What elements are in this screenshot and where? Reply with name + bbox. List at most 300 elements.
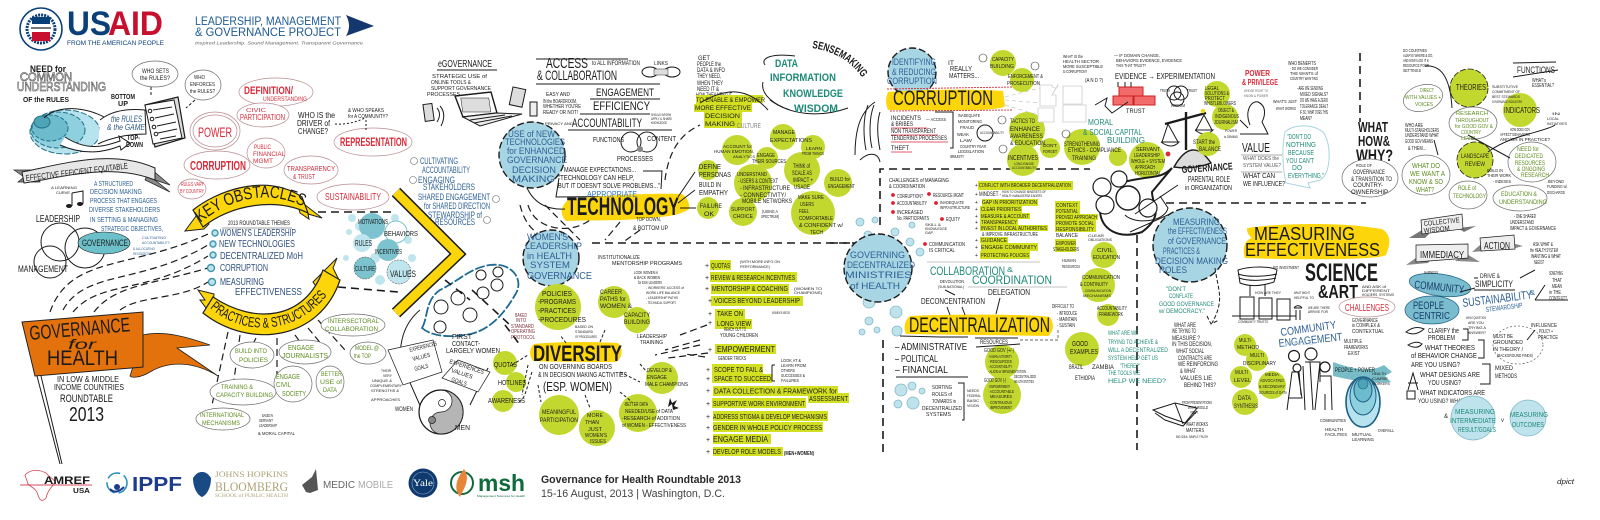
text block: numbered governance functions: STAKEHOLDERS: [423, 182, 475, 192]
text block: types of corruption: & BRIBES: [891, 121, 913, 128]
circles: measuring intermediate results and outcomes: RESULT/GOALS: [1458, 425, 1496, 434]
lime circles: technology tips: ENGAGEMENT: [828, 184, 855, 190]
heading: appropriate technology: & BOTTOM UP: [633, 226, 668, 232]
circle: governing decentralized ministries of health: [844, 234, 915, 302]
text block: servant leadership note: STRENGTHS &: [371, 388, 399, 393]
heading: sustainability and stewardship: SUSTAINABILITY: [1462, 288, 1533, 310]
flag: HEALTH: [47, 347, 118, 370]
list: decentralization highlighted items: CONTEXT: [1056, 203, 1078, 209]
lime circles: good examples and communication: ZAMBIA: [1092, 365, 1114, 371]
callout: must be grounded in theory: METHODS: [1495, 373, 1517, 380]
text block: types of corruption: NON TRANSPARENT: [891, 129, 936, 135]
callout: must be grounded in theory: POLICY +: [1539, 329, 1553, 335]
text block: functions and notes: WHO ARE: [1405, 123, 1423, 129]
text block: what are we trying to measure: VALUES LIE: [1180, 376, 1212, 382]
diagram: nested health system rings: FACILITIES: [1325, 432, 1347, 437]
lime circles: good examples and communication: EXAMPLES: [1070, 349, 1098, 356]
text block: ask what the system wanting: WANTING & WHAT: [1531, 254, 1561, 260]
text block: governance definition: STRATEGIC OBJECTIVES,: [101, 226, 163, 233]
list: diversity action items: +: [706, 449, 710, 456]
list: decentralization highlighted items: +: [975, 245, 978, 251]
lime circles: technology tips: EXPECTATIONS: [770, 138, 812, 144]
text block: administrative political financial: – FINANCIAL: [895, 365, 948, 376]
text block: sorting roles with molecule: VISION: [967, 403, 979, 408]
bubble: rules vary by country: [178, 179, 206, 199]
diagram: nested health system rings: MUTUAL: [1352, 432, 1373, 437]
list: diversity action items: (MEN+WOMEN): [784, 451, 814, 457]
heading: need for common understanding: OF the RULES: [23, 95, 69, 104]
bubble: research throughput: for GOOD GOV &: [1455, 124, 1493, 130]
text block: sorting roles with molecule: BASIC: [967, 398, 979, 403]
USAID logo: FROM THE AMERICAN PEOPLE: [67, 40, 165, 47]
icon: puzzle pieces: [1005, 85, 1086, 122]
heading: measuring effectiveness: EFFECTIVENESS: [1245, 240, 1380, 260]
circle: measuring effectiveness of governance practices: [1153, 208, 1228, 282]
text block: who is the driver of change: WHO IS the: [298, 111, 335, 120]
circle: identifying and reducing corruption: IDENTIFYING: [892, 57, 936, 67]
heading: e-governance: [427, 59, 497, 98]
logo: MSH: Management Sciences for Health: [477, 494, 525, 498]
list: diversity action items: +: [706, 376, 710, 383]
illustration: open book: - WHAT WORKS: [1184, 422, 1208, 428]
text block: what are we trying to measure: & WHAT: [1180, 369, 1196, 375]
text block: institutionalize mentorship: - TECHNICAL SUPPORT: [646, 300, 676, 305]
ribbon: immediacy: [1406, 244, 1480, 265]
text block: sorting roles with molecule: TOWARDS in: [932, 399, 956, 405]
bubble: role of governance transition: GOVERNANCE: [1353, 170, 1385, 176]
text block: resources and good governance: HEALTH ENTITIES: [1014, 379, 1034, 384]
list: diversity action items: YOUNG CHILDREN: [720, 333, 758, 339]
text block: get people the data: GET: [698, 55, 710, 62]
text block: servant leadership note: BASED IN: [262, 413, 273, 418]
text block: numbered governance functions: STEWARDSHIP of: [428, 210, 482, 220]
text block: challenges of managing: CORRUPTION?: [897, 194, 923, 200]
list: diversity action items: +: [706, 367, 710, 374]
text block: functions and notes: & THEM...: [1408, 146, 1426, 152]
text block: engagement efficiency accountability: APPLY & SHARE: [651, 116, 672, 121]
lime circles: diversity actions: DEVELOP &: [647, 368, 672, 374]
circle: governing decentralized ministries of health: GOVERNING: [850, 250, 905, 260]
callout: must be grounded in theory: [1493, 323, 1558, 380]
lime circles: diversity actions: THAN: [585, 420, 599, 426]
text block: get people the data: PEOPLE the: [697, 62, 721, 68]
bubble: public financial mgmt: FINANCIAL: [253, 151, 285, 158]
ribbon: effective efficient equitable: [14, 159, 170, 192]
bubble: intersectoral collaboration: INTERSECTORAL: [328, 318, 379, 325]
list: decentralization highlighted items: MINDSET -: [979, 192, 1001, 198]
text block: institutionalize mentorship: STANDARD: [575, 330, 593, 334]
lime circles: legal and balance: BALANCE: [1199, 147, 1221, 153]
lime circles: measurement methods: SYNTHESIS: [1234, 404, 1258, 410]
icon: building with documents: WE ARE THERE: [1308, 306, 1331, 310]
text block: governance definition: A STRUCTURED: [94, 181, 133, 188]
icon: building with documents: WHAT MIGHT: [1294, 291, 1311, 295]
subtitle: in low and middle income countries roundtable 2013: 2013: [69, 404, 104, 426]
arrow: dashed curve: [1207, 268, 1220, 324]
text block: challenges of managing: INCREASED: [897, 210, 923, 216]
text block: functions and notes: SUBSTITUTIVE: [1492, 84, 1518, 89]
bubble: power: [190, 112, 240, 150]
heading: decentralization: DECONCENTRATION: [921, 297, 985, 306]
callout: manage expectations: "TECHNOLOGY CAN HELP,: [558, 175, 634, 182]
bubble: engage journalists: [279, 340, 331, 364]
bubble: model at the top: MODEL @: [355, 345, 379, 352]
lime circles: legal and balance: INDIGENOUS: [1215, 114, 1240, 120]
bubble: need dedicated resources: RESOURCES: [1515, 161, 1545, 167]
lime circles: technology tips: PERSONAS: [699, 172, 731, 179]
text block: easy and in the boardroom: READY OR NOT!: [543, 110, 578, 116]
ribbon: collective wisdom: COLLECTIVE: [1423, 217, 1460, 228]
illustration: yin yang with values lists: VALUES: [412, 353, 431, 363]
text block: what are we trying to measure: CONTRACTS ARE: [1178, 356, 1212, 362]
logo: Medic Mobile: [302, 469, 393, 493]
list: decentralization highlighted items: ENGAGE COMMUNITY: [981, 245, 1037, 251]
lime circles: technology tips: LEARN: [806, 146, 822, 151]
heading: what how why: WHY?: [1356, 146, 1393, 165]
text block: types of corruption: INADEQUATE: [958, 113, 980, 118]
list: decentralization highlighted items: +: [975, 200, 978, 206]
callout: manage expectations: [556, 167, 662, 197]
text block: governance complex contextual: GOVERNANCE: [1352, 318, 1378, 324]
text block: resources and good governance: GOOD GOV (+/-): [984, 348, 1014, 354]
circle: use of new technologies: GOVERNANCE: [507, 155, 567, 165]
list: diversity action items: VOICES BEYOND LEADERSHIP: [714, 298, 800, 305]
text block: numbered governance functions: RESOURCES: [435, 217, 475, 227]
list: decentralization highlighted items: [975, 181, 1112, 259]
bubble: don't do nothing: BECAUSE: [1288, 150, 1314, 157]
text block: functions and notes: IMPACT & GOVERNANCE: [1510, 226, 1557, 232]
lime circles: technology tips: MANAGE: [773, 130, 795, 136]
lime circles: anti-corruption tactics: SERVANT: [1136, 147, 1160, 153]
heading: access and collaboration: & COLLABORATION: [537, 67, 617, 83]
list: decentralization highlighted items: +: [975, 253, 978, 259]
illustration: open book: [1153, 400, 1212, 439]
list: decentralization highlighted items: POTENTIAL: [1056, 209, 1078, 215]
illustration: open book: WHAT WOULD: [1188, 405, 1208, 410]
circle: women's leadership: [523, 230, 592, 286]
text block: first contact largely women: [446, 334, 500, 355]
list: decentralization highlighted items: PROVED APPROACH: [1056, 215, 1097, 221]
lime circles: measurement methods: SOURCES of DATA: [1259, 390, 1287, 395]
lime circles: good examples and communication: ACCOUNTABILITY: [1097, 306, 1127, 312]
text block: governance definition: RESOURCES: [133, 251, 151, 256]
bubble: connect values: WITH VALUES +: [1405, 95, 1441, 101]
text block: types of corruption: THEFT: [891, 145, 909, 152]
text block: drive and simplicity: SIMPLICITY: [1475, 279, 1513, 289]
list: design questions: YOU USING?: [1428, 380, 1461, 387]
bubble: role of technology: [1449, 181, 1487, 209]
list: diversity action items: (WITH MORE INFO ON: [740, 259, 780, 264]
bubble: what do we want to know: WHAT?: [1416, 187, 1434, 194]
text block: servant leadership note: LEADERSHIP: [259, 423, 277, 428]
bubble: rules vary by country: RULES VARY: [181, 182, 204, 188]
lime circles: theories indicators landscape review: THEORIES: [1456, 83, 1486, 92]
quote: don't conflate good governance: "DON'T: [1166, 286, 1186, 293]
Leadership, Management and Governance Project logo: LEADERSHIP, MANAGEMENT: [195, 14, 342, 28]
bubble: role of technology: TECHNOLOGY: [1453, 194, 1486, 200]
bubble: don't do nothing: EVERYTHING.": [1288, 173, 1324, 180]
text block: power and privilege: WHAT'S JUST: [1273, 99, 1297, 104]
bubble: role of technology: ROLE of: [1458, 186, 1476, 192]
text block: sorting roles with molecule: SORTING: [932, 385, 952, 391]
illustration: yin yang with values lists: [388, 310, 490, 434]
text block: roundtable themes list: [208, 220, 303, 298]
lime circles: technology tips: ANALYTICS: [733, 154, 755, 159]
panel: red concept bubbles: [178, 78, 412, 210]
list: decentralization highlighted items: RESPONSIBILITY: [1056, 227, 1095, 233]
list: diversity action items: REVIEW & RESEARCH INCENTIVES: [711, 275, 795, 282]
circles: measuring intermediate results and outcomes: &: [1444, 414, 1448, 420]
text block: functions and notes: HOW DOES GOV: [1510, 127, 1530, 132]
text block: what is the health sector: HEALTH SECTOR: [1063, 59, 1100, 64]
bubble: definition understanding: DEFINITION/: [244, 85, 293, 97]
text block: power and privilege: [1240, 69, 1297, 134]
ribbon: collective wisdom: [1409, 214, 1476, 238]
text block: easy and in the boardroom: PRIVACY AND: [545, 121, 573, 126]
text block: governance complex contextual: EXIST: [1348, 351, 1360, 357]
list: diversity action items: +: [708, 320, 712, 327]
bubble: better use of data: DATA: [323, 387, 338, 394]
bubble: who enforces the rules: [185, 70, 221, 108]
text block: what are we trying to achieve: WILL A DECENTRALIZED: [1108, 347, 1168, 354]
list: diversity action items: FAILURES: [781, 378, 799, 383]
lime circles: measurement methods: DISCIPLINARY: [1243, 361, 1276, 367]
lime circles: measurement methods: ADVOCATING: [1260, 378, 1284, 383]
text block: types of corruption: TENDERING PROCESSES: [891, 136, 947, 142]
diagram: nested health system rings: COMMUNITIES: [1320, 418, 1346, 423]
text block: servant leadership note: [258, 368, 402, 436]
list: design questions: WHAT THEORIES: [1425, 343, 1475, 352]
text block: roundtable themes list: MEASURING: [220, 277, 264, 288]
circles: measuring intermediate results and outcomes: [1444, 396, 1548, 440]
bubble: sustainability: SUSTAINABILITY: [325, 192, 381, 203]
illustration: yin yang with values lists: MEN: [455, 425, 470, 432]
text block: institutionalize mentorship: BASED ON: [575, 325, 593, 329]
illustration: open book: MATTERS: [1186, 428, 1204, 434]
Leadership, Management and Governance Project logo: [195, 14, 374, 46]
text block: get people the data: DATA & INFO: [697, 68, 725, 74]
diagram: leadership management governance venn: LEADERSHIP: [36, 214, 80, 225]
bubble: better use of data: BETTER: [321, 371, 342, 378]
bubble: corruption: CORRUPTION: [190, 158, 246, 173]
list: decentralization highlighted items: & IMPROVE INFRASTRUCTURE: [982, 232, 1038, 238]
heading: what how why: WHAT: [1358, 119, 1388, 136]
text block: what are we trying to achieve: HELP WE NEED?: [1108, 378, 1166, 385]
ribbon: collective wisdom: WISDOM: [1423, 225, 1450, 235]
logo: Yale: [408, 468, 438, 498]
ellipse: people centric: PEOPLE: [1413, 300, 1444, 312]
bubble: who enforces the rules: the RULES?: [190, 89, 215, 95]
text block: servant leadership note: UNIQUE &: [372, 378, 392, 383]
panel: motivations cluster: [343, 213, 418, 285]
venn: functions content processes: [593, 132, 676, 163]
text block: types of corruption: INCIDENTS: [891, 115, 922, 122]
text block: functions and notes: FUNCTIONS: [1517, 65, 1555, 75]
text block: community engagement: IS CRITICAL: [1285, 341, 1314, 346]
circle: women's leadership: WOMEN'S: [527, 232, 568, 242]
illustration: open book: FROM PRESENTATIONS: [1182, 400, 1212, 405]
list: design questions: CLARIFY the: [1428, 328, 1459, 335]
text block: what are we trying to achieve: SYSTEM HELP GET US: [1108, 355, 1158, 362]
curved text: sensemaking: SENSEMAKING: [812, 40, 868, 76]
lime circles: technology tips: FROM THINGS: [802, 151, 824, 156]
lime circles: technology tips: ENGAGE: [757, 153, 776, 159]
icon: learning curve music notes: CURVE: [56, 190, 70, 195]
text block: what is the health sector: BEHAVIORS EVIDENCE, EVIDENCE: [1116, 58, 1182, 64]
text block: types of corruption: MONITORING: [958, 119, 982, 124]
text block: roundtable themes list: DECENTRALIZED MoH: [220, 251, 303, 262]
logo: Johns Hopkins Bloomberg: [193, 470, 288, 499]
bubble: who sets the rules: WHO SETS: [142, 68, 170, 75]
illustration: hand: [855, 102, 880, 162]
text block: power and privilege: & PRIVILEGE: [1242, 78, 1278, 87]
logo: AMREF USA: AMREF: [44, 475, 90, 487]
text block: functions and notes: DO COUNTRIES: [1403, 48, 1427, 53]
text block: easy and in the boardroom: [543, 92, 582, 126]
lime circles: anti-corruption tactics: BUILDING: [990, 64, 1014, 70]
illustration: yin yang with values lists: GOALS: [450, 377, 467, 388]
list: diversity action items: ASSESSMENT: [809, 396, 849, 403]
text block: numbered governance functions: ACCOUNTABILITY: [422, 165, 470, 175]
bubble: culture: CULTURE: [355, 266, 375, 273]
circle: women's leadership: in HEALTH: [527, 251, 572, 261]
circles: measuring intermediate results and outcomes: OUTCOMES: [1512, 420, 1544, 429]
bubble: who sets the rules: the RULES?: [140, 75, 170, 82]
bubble: what do we want to know: KNOW & SO: [1409, 179, 1443, 186]
bubble: definition understanding: [239, 78, 313, 106]
text block: ask what the system wanting: SOMETHING: [1549, 271, 1563, 277]
list: diversity action items: (WOMEN TO: [794, 286, 822, 291]
bubble: transparency and trust: & TRUST: [293, 174, 316, 181]
circle: governing decentralized ministries of health: DECENTRALIZED: [847, 260, 915, 270]
lime circles: technology tips: USERS: [800, 202, 814, 208]
lime circles: diversity actions: POLICIES: [542, 291, 572, 298]
text block: functions and notes: DISCHARGE: [1547, 190, 1565, 195]
text block: sorting roles with molecule: SYSTEMS: [926, 412, 951, 418]
lime circles: good examples and communication: HUMAN: [1062, 258, 1076, 263]
text block: ask what the system wanting: [1460, 242, 1568, 302]
pyramid: data information knowledge wisdom: WISDOM: [794, 103, 838, 115]
lime circles: technology tips: (USING A: [762, 209, 778, 214]
lime circles: technology tips: HUMAN EMOTION,: [714, 149, 754, 154]
lime circles: good examples and communication: RESOURCES: [1062, 264, 1080, 269]
icon: building with documents: COMMUNITY TRUSTS: [1238, 320, 1268, 324]
ribbon: practices and structures: [196, 258, 341, 336]
list: decentralization highlighted items: OBLIGATIONS: [1088, 237, 1112, 242]
text block: functions and notes: BUILD IN: [1487, 168, 1503, 173]
icon: building with documents: HOW ARE THEY: [1255, 291, 1281, 295]
list: diversity action items: QUOTAS: [711, 263, 730, 270]
lime circles: diversity actions: PARTICIPATION: [540, 418, 578, 424]
highlighted text: enable and empower: MAKING: [705, 121, 735, 128]
lime circles: theories indicators landscape review: INDICATORS: [1504, 106, 1540, 115]
panel: key obstacles and practices ribbons: [184, 184, 398, 404]
lime circles: technology tips: FAILURE: [700, 203, 723, 210]
heading: what how why: HOW&: [1358, 133, 1390, 150]
text block: get people the data: WHEN THEY: [697, 81, 723, 87]
list: diversity action items: +: [706, 401, 710, 408]
list: design questions: WHAT QUESTION: [1466, 315, 1486, 320]
bubble: role of governance transition: [1342, 159, 1398, 197]
text block: resources and good governance: - HUMAN AUTHORITY: [988, 354, 1012, 359]
lime circles: good examples and communication: CIVIL: [1097, 248, 1113, 254]
icon: red bricks and handshake: [1095, 82, 1155, 115]
lime circles: measurement methods: DATA: [1238, 396, 1251, 402]
text block: community engagement: COMMUNITY: [1280, 319, 1337, 339]
ellipse: community: [1408, 270, 1472, 300]
heading: corruption: IT: [948, 61, 954, 67]
lime circles: anti-corruption tactics: STRENGTHENING: [1064, 142, 1100, 148]
bubble: engage civil society: SOCIETY: [282, 391, 306, 398]
text block: who benefits: MIXED SIGNALS?: [1300, 92, 1328, 98]
bubble: connect values: VOICES: [1415, 102, 1433, 108]
text block: on governing boards: [538, 364, 627, 394]
text block: value: SYSTEM VALUE?: [1243, 163, 1281, 169]
bubble: research throughput: RESEARCH: [1456, 111, 1488, 117]
list: decentralization highlighted items: STAKEHOLDERS: [1053, 247, 1079, 253]
list: decentralization highlighted items: GAP IN PRIORITIZATION: [982, 200, 1037, 206]
bubble: better use of data: USE of: [320, 379, 342, 386]
bubble: better use of data: [316, 366, 344, 398]
bubble: values: VALUES: [390, 269, 416, 279]
bubble: need dedicated resources: RESEARCH: [1521, 173, 1549, 179]
text block: get people the data: HOW THEY NEED IT: [696, 93, 732, 99]
logo: MSH: [451, 469, 525, 498]
bubble: rules vary by country: BY COUNTRY: [180, 189, 204, 195]
logo: IPPF: IPPF: [132, 474, 182, 496]
heading: decentralization: DEVOLUTION: [940, 279, 964, 284]
lime circles: legal and balance: [1193, 81, 1240, 156]
text block: roundtable themes list: WOMEN'S LEADERSHIP: [220, 228, 296, 239]
heading: e-governance: ONLINE TOOLS &: [431, 80, 471, 86]
text block: who is the driver of change: for A COMMUNITY?: [348, 114, 388, 120]
diagram: nested health system rings: HEALTH: [1372, 371, 1386, 376]
text block: challenges of managing: [889, 178, 970, 254]
text block: ask what the system wanting: MEAN: [1552, 284, 1562, 290]
lime circles: good examples and communication: FRAMEWORK: [1099, 312, 1123, 318]
list: design questions: ANSWER?: [1468, 330, 1487, 335]
heading: science and art: &ART: [1318, 282, 1358, 302]
text block: functions and notes: INITIATIVES: [1547, 121, 1567, 126]
lime circles: anti-corruption tactics: APPROACH: [1135, 165, 1155, 171]
bubble: engage journalists: JOURNALISTS: [282, 353, 328, 360]
arrow: the rules of the game: UP: [118, 99, 128, 108]
bubble: build into policies: [230, 342, 274, 368]
text block: governance parental role: GOVERNANCE: [1181, 161, 1233, 176]
lime circles: diversity actions: -RESEARCH of ADDITION: [622, 416, 680, 422]
bubble: civic participation: CIVIC: [246, 108, 266, 114]
bubble: role of governance transition: & TRANSITION TO: [1351, 177, 1392, 183]
text block: numbered governance functions: SHARED ENGAGEMENT: [418, 192, 490, 202]
text block: governance definition: PROCESS THAT ENGAGES: [90, 198, 157, 205]
icon: building with documents: ARRIVE FOR: [1308, 310, 1328, 314]
text block: challenges of managing: RESOURCE MGMT: [933, 193, 964, 199]
text block: who benefits: - DO WE CONSIDER: [1290, 66, 1318, 71]
text block: ask what the system wanting: CONTEXT?: [1549, 296, 1567, 302]
text block: institutionalize mentorship: TRAINING: [640, 340, 663, 346]
logo: Medic Mobile: MOBILE: [358, 480, 393, 491]
heading: decentralization: (SUB-NATIONAL): [938, 284, 965, 289]
bubble: challenges: CHALLENGES: [1345, 303, 1389, 314]
pyramid: data information knowledge wisdom: DATA: [775, 58, 798, 70]
ribbon: effective efficient equitable: EFFECTIVE EFFICIENT EQUITABLE: [25, 160, 129, 183]
icon: building with documents: BIG INVESTMENT: [1273, 265, 1299, 270]
text block: standard operating protocol: [511, 313, 535, 341]
USAID logo: [20, 5, 165, 50]
bubble: training and capacity building: TRAINING &: [221, 384, 254, 391]
bubble: don't do nothing: NOTHING: [1286, 142, 1316, 149]
circle: identifying and reducing corruption: [887, 48, 937, 96]
